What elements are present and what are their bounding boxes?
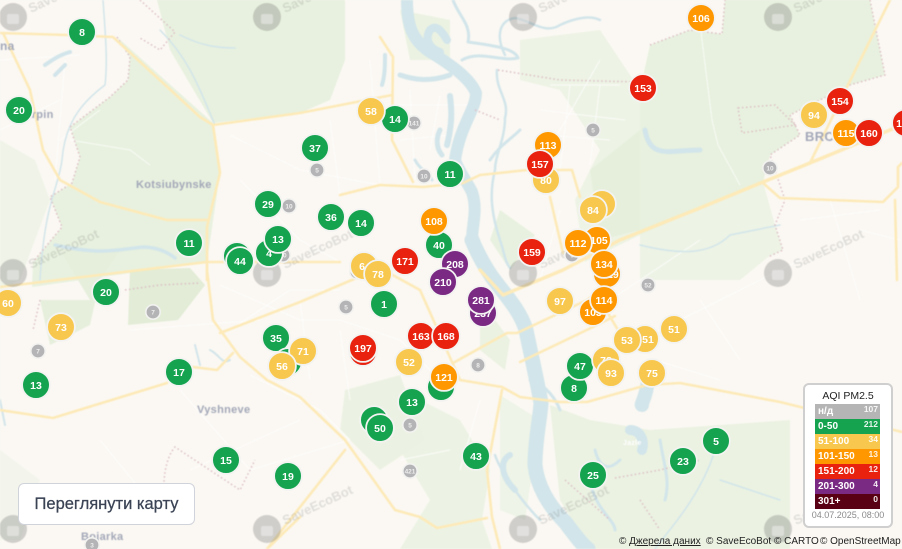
legend row: 0-50: 0-50 (818, 421, 838, 432)
legend row: 0-50: 212 (864, 419, 878, 429)
green markers: 37 (309, 143, 321, 155)
grey markers: no data: 5 (315, 168, 319, 174)
attribution: © Джерела даних (619, 536, 701, 547)
yellow markers: 78 (600, 355, 612, 367)
red markers: 153 (634, 83, 652, 95)
legend row: 301+ (815, 494, 880, 509)
orange markers: 106 (692, 13, 710, 25)
purple markers: 281 (472, 295, 490, 307)
green markers (5, 18, 730, 490)
watermark: SaveEcoBot tile pattern: SaveEcoBot (26, 482, 102, 528)
legend row: 201-300: 4 (873, 479, 878, 489)
yellow markers: 84 (587, 205, 599, 217)
watermark: SaveEcoBot tile pattern: SaveEcoBot (280, 482, 356, 528)
grey markers: no data (31, 116, 777, 549)
place names: Karpin (17, 109, 54, 121)
attribution: © OpenStreetMap (820, 536, 901, 547)
legend row: no data (815, 404, 880, 419)
legend row: 101-150: 13 (869, 449, 878, 459)
orange markers: 129 (601, 269, 619, 281)
green markers: 50 (374, 423, 386, 435)
green markers: 29 (262, 199, 274, 211)
legend row: 51-100: 34 (869, 434, 878, 444)
yellow markers: 60 (2, 298, 14, 310)
green markers: 20 (13, 105, 25, 117)
orange markers (420, 4, 860, 391)
orange markers: 121 (435, 372, 453, 384)
purple markers (429, 250, 497, 327)
grey markers: no data: 5 (591, 128, 595, 134)
orange markers: 114 (596, 295, 613, 307)
orange markers: 103 (584, 307, 602, 319)
red markers: 171 (396, 256, 414, 268)
grey markers: no data: 5 (344, 304, 348, 312)
green markers: 47 (574, 361, 586, 373)
grey markers: no data: 10 (285, 204, 293, 210)
grey markers: no data: 5 (408, 422, 412, 430)
purple markers: 208 (446, 259, 464, 271)
green markers: 11 (444, 169, 456, 181)
yellow markers: 52 (403, 357, 415, 369)
watermark: SaveEcoBot tile pattern: SaveEcoBot (536, 226, 612, 272)
attribution (619, 536, 901, 547)
legend row: 101-150 (815, 449, 880, 464)
button: view map: Переглянути карту (35, 495, 178, 513)
orange markers: 105 (590, 235, 608, 247)
green markers: 5 (713, 436, 719, 448)
green markers: 14 (389, 114, 401, 126)
legend: AQI PM2.5 (803, 383, 893, 528)
green markers: 36 (325, 212, 337, 224)
button: view map (18, 483, 195, 525)
red markers: 168 (437, 331, 455, 343)
green markers: 40 (433, 240, 445, 252)
orange markers: 115 (838, 128, 855, 140)
legend row: 301+: 301+ (818, 496, 841, 507)
orange markers: 112 (570, 238, 587, 250)
grey markers: no data: 10 (279, 252, 287, 260)
red markers: 154 (831, 96, 849, 108)
green markers: 35 (270, 333, 282, 345)
green markers: 8 (571, 383, 577, 395)
yellow markers: 94 (808, 110, 820, 122)
yellow markers: 58 (365, 106, 377, 118)
watermark: SaveEcoBot tile pattern: SaveEcoBot (536, 482, 612, 528)
place names: na (0, 39, 15, 53)
grey markers: no data: 7 (355, 270, 359, 276)
yellow markers: 93 (605, 368, 617, 380)
legend title: AQI PM2.5 (822, 390, 874, 402)
place names: Kotsiubynske (136, 179, 212, 191)
legend row: no data: н/д (818, 406, 833, 417)
orange markers: 108 (425, 216, 443, 228)
green markers: 8 (79, 27, 85, 39)
yellow markers: 78 (372, 269, 384, 281)
red markers: 157 (531, 159, 549, 171)
yellow markers: 80 (540, 175, 552, 187)
grey markers: no data: 9 (570, 252, 574, 260)
grey markers: no data: 52 (644, 282, 652, 290)
legend row: 101-150: 101-150 (818, 451, 855, 462)
legend row: 201-300 (815, 479, 880, 494)
grey markers: no data: 421 (405, 468, 416, 476)
yellow markers (0, 97, 828, 387)
grey markers: no data: 10 (420, 174, 428, 180)
grey markers: no data: 141 (409, 120, 420, 128)
legend row: 151-200: 12 (869, 464, 878, 474)
green markers: 13 (406, 397, 418, 409)
legend row: 151-200: 151-200 (818, 466, 855, 477)
yellow markers: 51 (668, 324, 680, 336)
attribution: © SaveEcoBot (706, 536, 771, 547)
legend row: no data: 107 (864, 404, 878, 414)
place names: Bojarka (81, 531, 124, 543)
green markers: 25 (587, 470, 599, 482)
red markers: 160 (860, 128, 878, 140)
green markers: 4 (266, 248, 272, 260)
green markers: 20 (100, 287, 112, 299)
grey markers: no data: 10 (766, 166, 774, 172)
place names: BRC (805, 129, 834, 144)
grey markers: no data: 8 (476, 362, 480, 370)
place names: Jazle (623, 440, 642, 447)
watermark: SaveEcoBot tile pattern: SaveEcoBot (280, 226, 356, 272)
green markers: 13 (30, 380, 42, 392)
green markers: 44 (234, 256, 246, 268)
green markers: 15 (220, 455, 232, 467)
green markers: 13 (272, 234, 284, 246)
purple markers: 237 (474, 308, 492, 320)
green markers: 14 (355, 218, 367, 230)
attribution: © CARTO (774, 536, 819, 547)
watermark: SaveEcoBot tile pattern: SaveEcoBot (791, 482, 867, 528)
purple markers: 210 (434, 277, 452, 289)
grey markers: no data: 7 (151, 310, 155, 316)
green markers: 23 (677, 456, 689, 468)
red markers: 197 (354, 343, 372, 355)
orange markers: 113 (540, 140, 557, 152)
legend timestamp: 04.07.2025, 08:00 (812, 510, 884, 520)
yellow markers: 56 (276, 361, 288, 373)
green markers: 19 (282, 471, 294, 483)
yellow markers: 51 (642, 334, 654, 346)
legend row: 0-50 (815, 419, 880, 434)
yellow markers: 53 (621, 335, 633, 347)
yellow markers: 73 (55, 322, 67, 334)
legend row: 151-200 (815, 464, 880, 479)
red markers (349, 74, 902, 366)
yellow markers: 71 (297, 346, 309, 358)
green markers: 1 (381, 299, 387, 311)
yellow markers: 97 (554, 296, 566, 308)
legend row: 301+: 0 (873, 494, 878, 504)
red markers: 159 (523, 247, 541, 259)
grey markers: no data: 7 (36, 348, 40, 356)
watermark: SaveEcoBot tile pattern: SaveEcoBot (26, 226, 102, 272)
legend row: 51-100: 51-100 (818, 436, 849, 447)
place names: Vyshneve (197, 404, 250, 416)
orange markers: 134 (595, 259, 613, 271)
yellow markers: 75 (646, 368, 658, 380)
watermark: SaveEcoBot tile pattern: SaveEcoBot (791, 226, 867, 272)
green markers: 43 (470, 451, 482, 463)
legend row: 51-100 (815, 434, 880, 449)
legend row: 201-300: 201-300 (818, 481, 855, 492)
green markers: 11 (183, 238, 195, 250)
red markers: 163 (412, 331, 430, 343)
yellow markers: 6 (359, 261, 365, 273)
red markers: 1 (896, 118, 902, 130)
green markers: 17 (173, 367, 185, 379)
